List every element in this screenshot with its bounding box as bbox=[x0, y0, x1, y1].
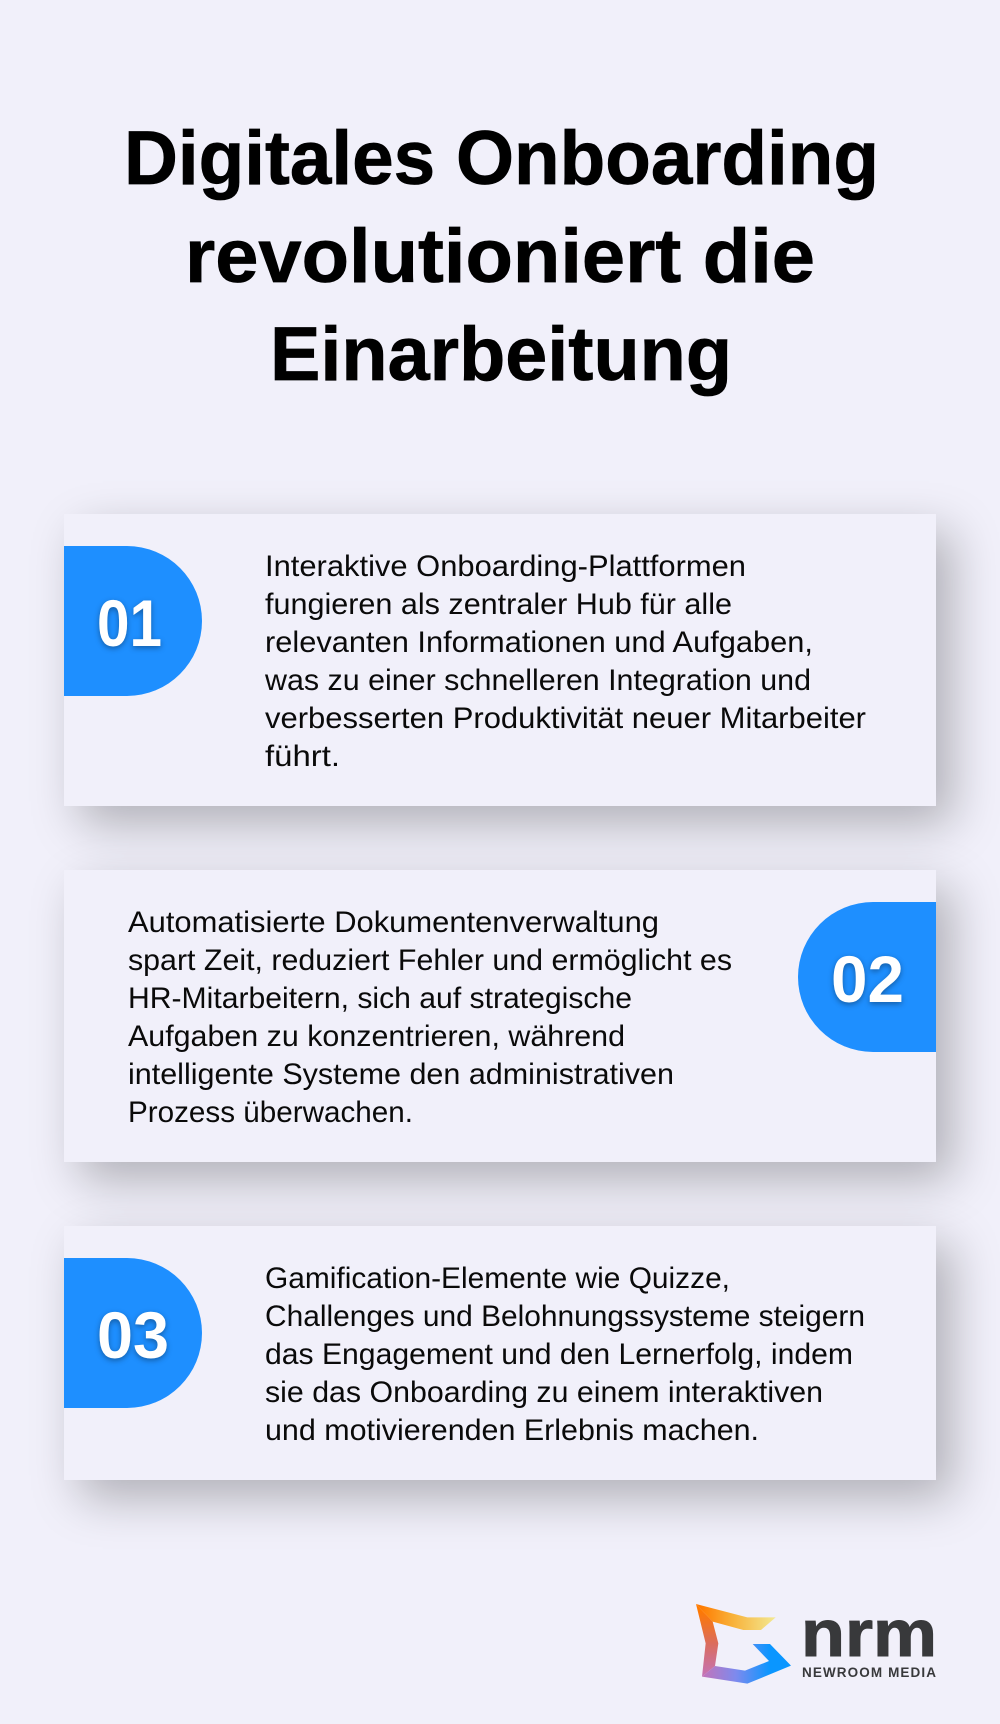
text: card 3 description: und motivierenden Erlebnis machen. bbox=[265, 1414, 759, 1447]
text: card 3 description: Challenges und Belohnungssysteme steigern bbox=[265, 1300, 865, 1333]
text: card 2 description bbox=[128, 906, 732, 1129]
panel: card 3 bbox=[64, 1226, 936, 1480]
text: card 1 description: führt. bbox=[265, 740, 340, 773]
logo wordmark: NEWROOM MEDIA bbox=[802, 1665, 936, 1680]
title: revolutioniert die bbox=[185, 214, 815, 299]
text: card 1 description: verbesserten Produktivität neuer Mitarbeiter bbox=[265, 702, 866, 735]
text: card 2 description: intelligente Systeme den administrativen bbox=[128, 1058, 674, 1091]
icon: logo mark bbox=[696, 1604, 791, 1684]
text: card 2 description: spart Zeit, reduziert Fehler und ermöglicht es bbox=[128, 944, 732, 977]
text: card 3 description bbox=[265, 1262, 865, 1447]
badge: 01 bbox=[64, 546, 202, 696]
text: card 2 description: Prozess überwachen. bbox=[128, 1096, 413, 1129]
badge: 02 bbox=[798, 902, 936, 1052]
text: card 1 description bbox=[264, 550, 866, 773]
badge: 01: 01 bbox=[97, 586, 162, 660]
text: card 2 description: Aufgaben zu konzentrieren, während bbox=[128, 1020, 625, 1053]
text: card 3 description: sie das Onboarding zu einem interaktiven bbox=[265, 1376, 823, 1409]
title: Einarbeitung bbox=[270, 312, 732, 397]
text: card 1 description: fungieren als zentraler Hub für alle bbox=[265, 588, 732, 621]
title bbox=[124, 120, 879, 397]
text: card 2 description: Automatisierte Dokumentenverwaltung bbox=[128, 906, 659, 939]
badge: 02: 02 bbox=[831, 942, 904, 1016]
badge: 03: 03 bbox=[97, 1298, 169, 1372]
panel: card 1 bbox=[64, 514, 936, 806]
text: card 2 description: HR-Mitarbeitern, sich auf strategische bbox=[128, 982, 632, 1015]
text: card 1 description: relevanten Informationen und Aufgaben, bbox=[265, 626, 813, 659]
text: card 1 description: was zu einer schnelleren Integration und bbox=[264, 664, 811, 697]
text: card 1 description: Interaktive Onboarding-Plattformen bbox=[265, 550, 746, 583]
text: card 3 description: Gamification-Elemente wie Quizze, bbox=[265, 1262, 730, 1295]
badge: 03 bbox=[64, 1258, 202, 1408]
logo: NRM Newroom Media bbox=[696, 1600, 937, 1684]
text: card 3 description: das Engagement und den Lernerfolg, indem bbox=[265, 1338, 853, 1371]
panel: card 2 bbox=[64, 870, 936, 1162]
